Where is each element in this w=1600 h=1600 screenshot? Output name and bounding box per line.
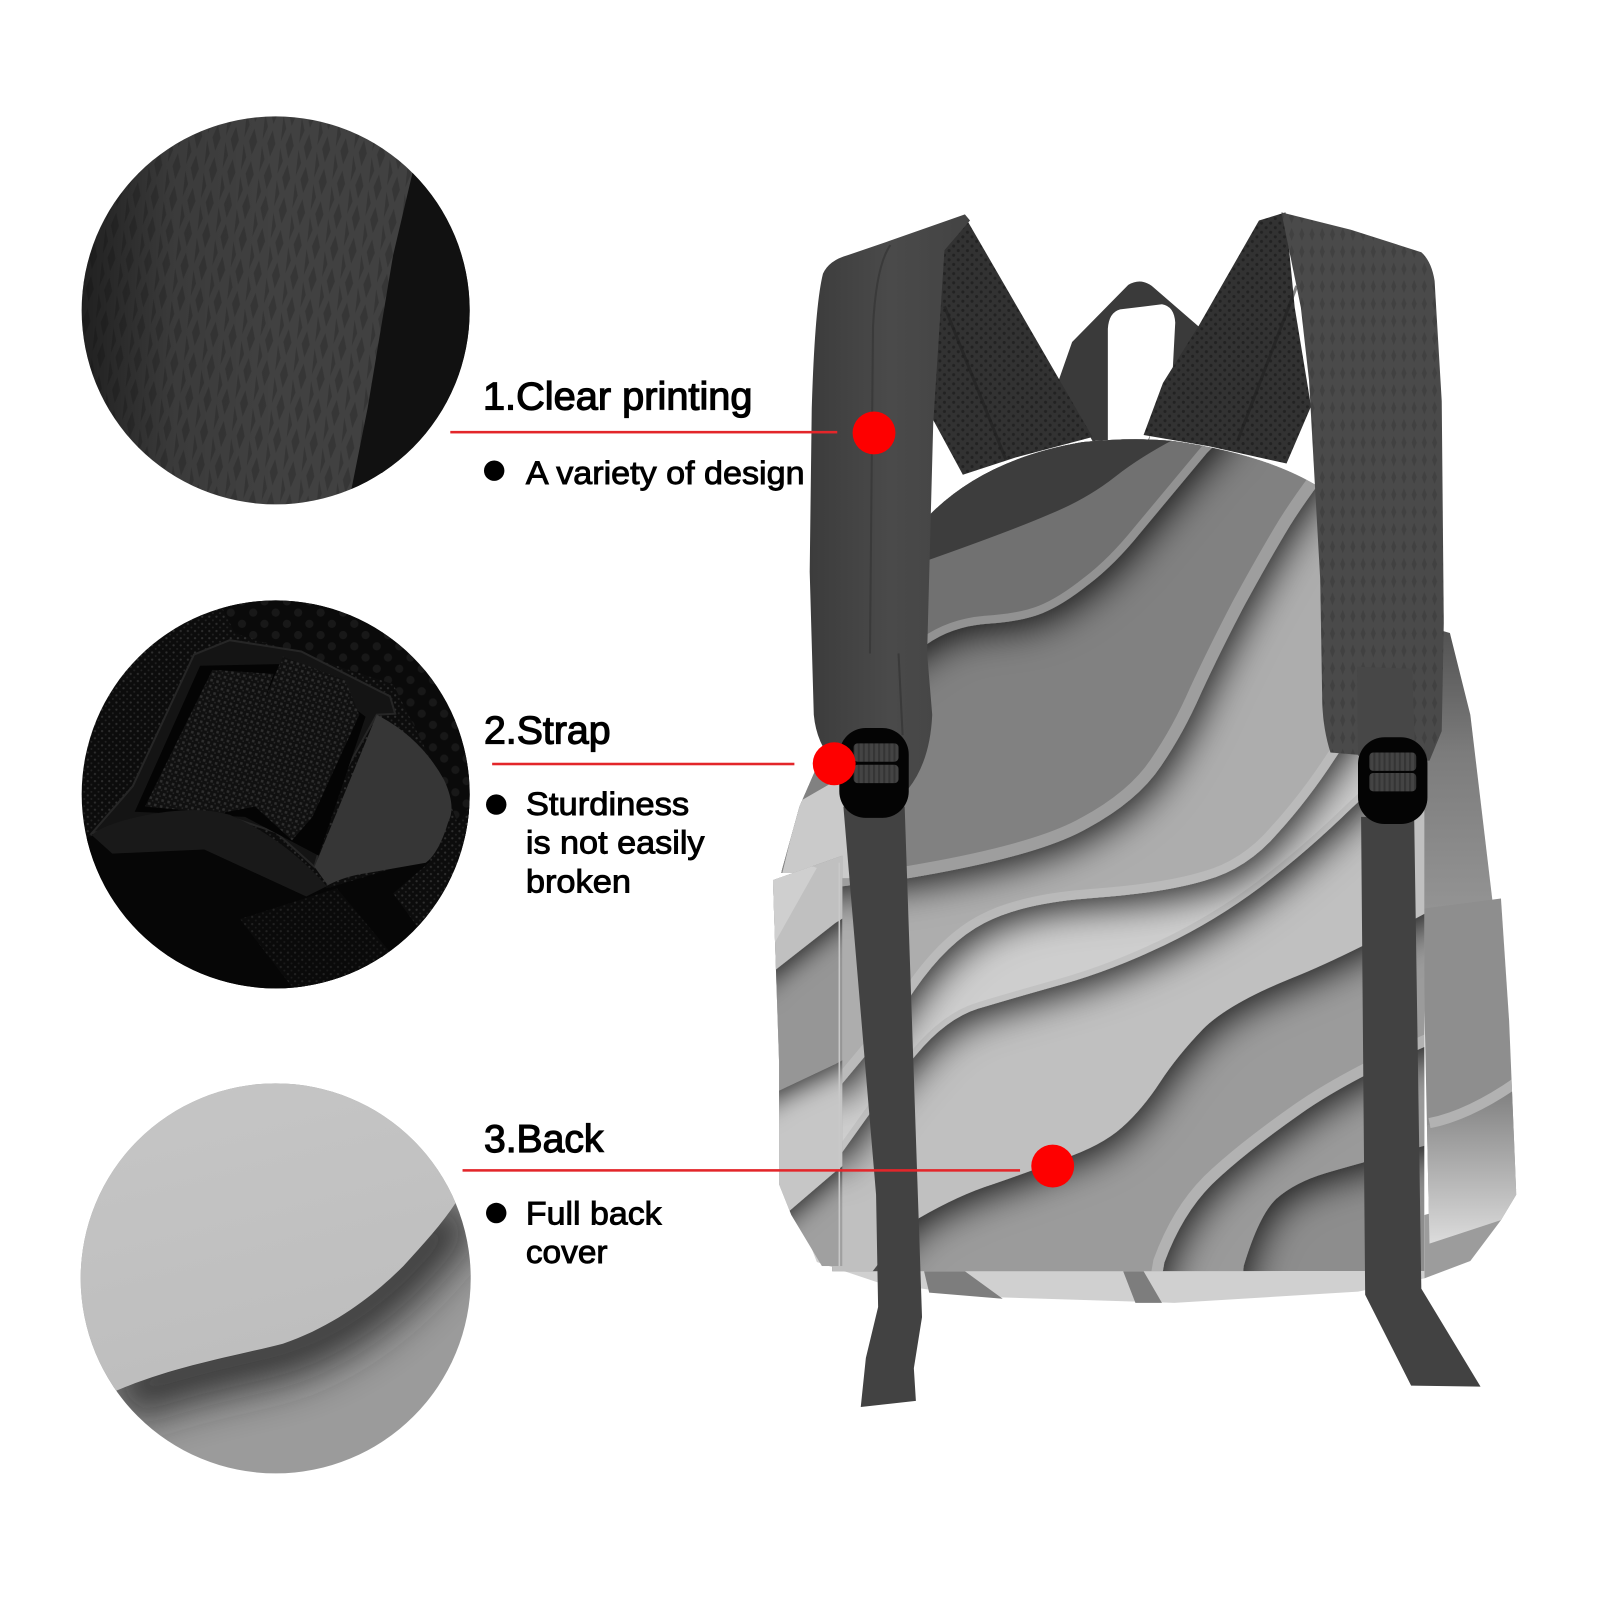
callout: clear printing [450,375,837,491]
bullet [486,1203,506,1223]
description: Full back [526,1194,662,1231]
marker: strap [813,742,856,785]
lower webbing [240,888,390,988]
left pad seam [870,245,903,735]
right side panel [1414,623,1493,914]
top handle [1059,282,1205,441]
left pocket [773,856,842,1266]
right webbing strap [1361,817,1481,1387]
wave A dark top [930,439,1172,560]
left shoulder mesh [929,216,1093,475]
buckle opening [135,664,366,856]
wave 5 [832,1035,1424,1272]
leader line [463,1169,1020,1172]
wave 1 [776,388,1338,888]
right pocket [1424,898,1516,1244]
panel: fabric detail circle [82,116,470,504]
bag bottom edge [807,1235,1424,1303]
buckle flap [314,715,452,885]
front panel with wave layers [781,439,1424,1272]
left buckle [839,728,909,818]
wave B [927,439,1246,683]
right shoulder pad [1281,212,1444,761]
callout: back [463,1118,1020,1270]
bullet [484,460,504,481]
right pocket lower panel [1427,1092,1516,1244]
panel: strap buckle detail circle [82,600,470,988]
upper left light corner [782,784,850,878]
callout: back: cover [526,1233,608,1270]
left mesh fold [944,306,1006,459]
description: A variety of design [526,454,805,491]
right shoulder mesh [1144,212,1311,464]
callout: strap [484,709,794,899]
leader line [450,431,837,433]
right upper webbing [1357,667,1415,756]
bottom shading wedges [924,1271,1162,1303]
wave 6 [832,1010,1424,1272]
buckle front bar [92,810,327,896]
dark fabric edge [352,173,470,489]
wave 3 [842,754,1366,1188]
left webbing strap [843,807,922,1407]
right mesh fold [1238,286,1297,441]
wave 2 [842,490,1360,1119]
left pocket waves [779,1060,842,1230]
backpack illustration [756,212,1521,1407]
bullet [486,794,506,815]
heading: 2.Strap [484,709,611,752]
right pocket fold strip [1429,1080,1519,1123]
light upper surface [80,1084,456,1390]
buckle frame [92,640,395,867]
callout: strap: is not easily [526,824,705,861]
left dark falloff [82,146,174,474]
marker: back [1031,1145,1074,1187]
wave 4 [832,802,1424,1272]
left pocket seam [838,863,840,1266]
heading: 3.Back [484,1118,604,1161]
shadow below curve [116,1208,456,1397]
padded mesh background [222,600,470,838]
lower right webbing [394,807,470,927]
strap webbing left [145,670,274,814]
heading: 1.Clear printing [483,375,753,418]
marker: clear printing [853,411,895,454]
panel: back material circle [80,1083,471,1474]
right buckle [1358,737,1427,824]
description: Sturdiness [526,785,689,822]
strap webbing right [216,657,359,840]
leader line [492,763,794,765]
left shoulder pad [810,214,970,788]
dark lower area [86,837,449,988]
callout: strap: broken [526,862,631,899]
right bottom corner [1424,1190,1516,1278]
